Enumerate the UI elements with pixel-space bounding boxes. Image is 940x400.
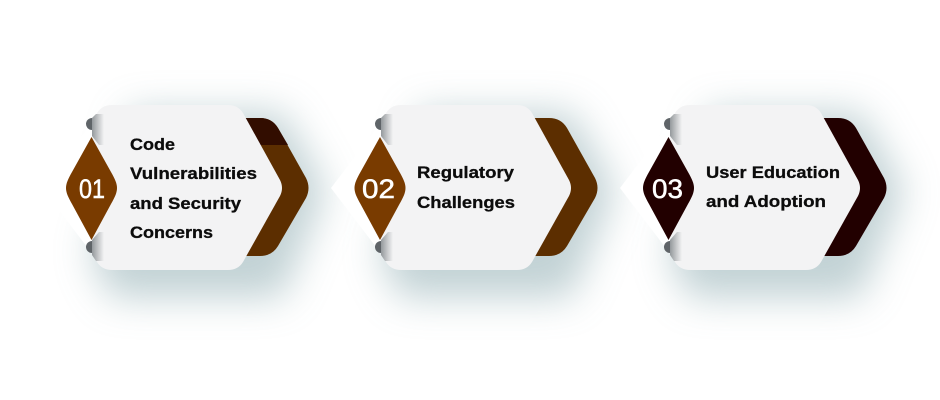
shadow 1	[90, 112, 326, 298]
card 3	[670, 105, 860, 270]
text 1: Code	[130, 135, 175, 154]
back chevron 3	[813, 118, 886, 256]
number 2: 02	[362, 174, 395, 204]
fold tabs 1	[86, 118, 98, 253]
fold tabs 3	[664, 118, 676, 253]
number 3: 03	[652, 174, 683, 204]
card 1	[92, 105, 282, 270]
text 3	[706, 163, 840, 211]
text 1: Vulnerabilities	[130, 164, 257, 183]
text 2	[417, 163, 515, 212]
diamond 3	[643, 137, 694, 240]
back chevron 1	[235, 118, 308, 256]
chevron top band 1	[235, 118, 288, 145]
panel: item 2	[331, 105, 615, 298]
diamond 1	[66, 137, 117, 240]
text 3: and Adoption	[706, 192, 826, 211]
text 1: Concerns	[130, 223, 213, 242]
diamond 2	[354, 137, 406, 240]
fold tabs 2	[375, 118, 387, 253]
fold shade 3	[670, 114, 682, 261]
card 2	[381, 105, 571, 270]
fold shade 1	[92, 114, 104, 261]
shadow 3	[668, 112, 904, 298]
number 1: 01	[79, 174, 105, 204]
white back hexagon 2	[331, 129, 399, 247]
text 1	[130, 135, 257, 242]
white back hexagon 3	[620, 129, 688, 247]
text 2: Challenges	[417, 193, 515, 212]
back chevron 2	[524, 118, 598, 256]
fold shade 2	[381, 114, 393, 261]
white back hexagon 1	[42, 129, 110, 247]
text 2: Regulatory	[417, 163, 515, 182]
panel: item 3	[620, 105, 904, 298]
text 3: User Education	[706, 163, 840, 182]
text 1: and Security	[130, 194, 242, 213]
panel: item 1	[42, 105, 326, 298]
shadow 2	[379, 112, 615, 298]
